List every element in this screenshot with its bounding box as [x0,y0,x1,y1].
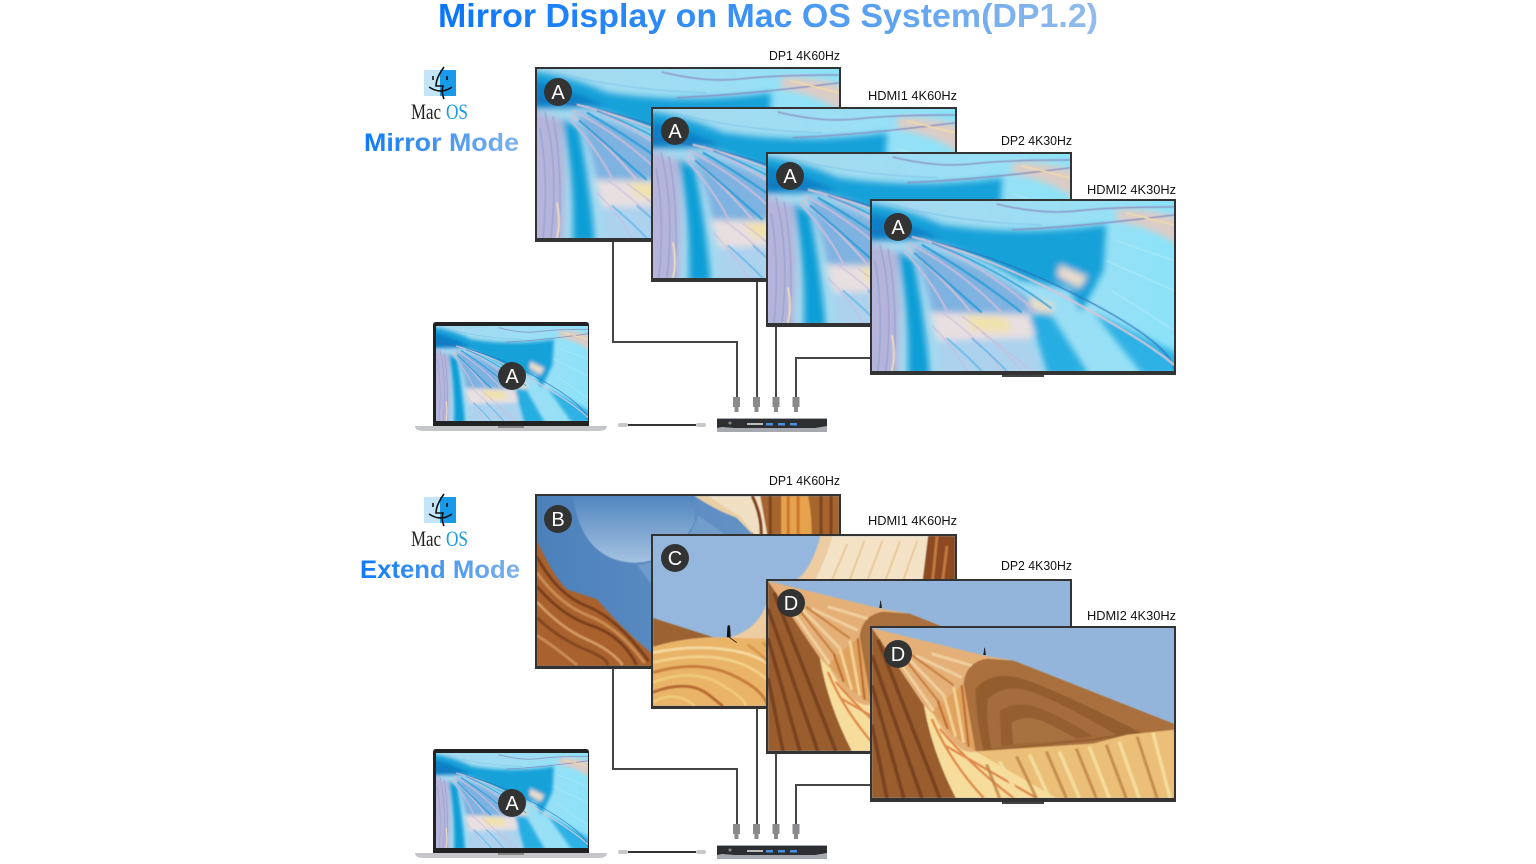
docking station [717,845,827,859]
docking station [717,418,827,432]
monitor: HDMI2: A [891,217,905,239]
heading: extend mode: Extend Mode [360,556,520,584]
monitor: HDMI1 [648,89,962,282]
monitor: HDMI2 [867,183,1181,377]
heading: mirror mode: Mirror Mode [364,129,519,157]
monitor: DP2: DP2 4K30Hz [1001,134,1072,148]
monitor: HDMI1: A [668,121,682,143]
monitor: DP1: DP1 4K60Hz [769,474,840,488]
monitor: DP2: DP2 4K30Hz [1001,559,1072,573]
USB-C cable [618,423,706,427]
cables [613,242,871,397]
monitor: DP2 [763,134,1077,327]
icon: Mac OS logo [411,67,468,124]
monitor: HDMI1: HDMI1 4K60Hz [868,514,957,528]
monitor: HDMI1: C [668,548,682,570]
icon: Mac OS logo [411,494,468,551]
cables [613,669,871,824]
monitor: DP2: A [783,166,797,188]
icon: Mac OS logo: Mac [411,526,441,551]
monitor: HDMI2: HDMI2 4K30Hz [1087,183,1176,197]
laptop [415,322,607,431]
monitor: DP1 [532,49,846,242]
monitor: HDMI1 [651,514,957,709]
monitor: DP1 [535,474,841,669]
plugs [733,397,800,412]
icon: Mac OS logo: Mac [411,99,441,124]
icon: Mac OS logo: OS [446,99,468,124]
monitor: DP2 [766,559,1072,754]
monitor: DP1: B [551,509,565,531]
panel: extend mode [360,474,1176,859]
laptop: A [505,366,519,388]
monitor: HDMI2: HDMI2 4K30Hz [1087,609,1176,623]
monitor: DP1: DP1 4K60Hz [769,49,840,63]
laptop: A [505,793,519,815]
laptop [415,749,607,858]
monitor: HDMI1: HDMI1 4K60Hz [868,89,957,103]
monitor: DP2: D [784,593,798,615]
panel: mirror mode [364,49,1181,432]
icon: Mac OS logo: OS [446,526,468,551]
monitor: HDMI2 [870,609,1176,804]
plugs [733,824,800,839]
monitor: DP1: A [551,82,565,104]
USB-C cable [618,850,706,854]
monitor: HDMI2: D [891,644,905,666]
